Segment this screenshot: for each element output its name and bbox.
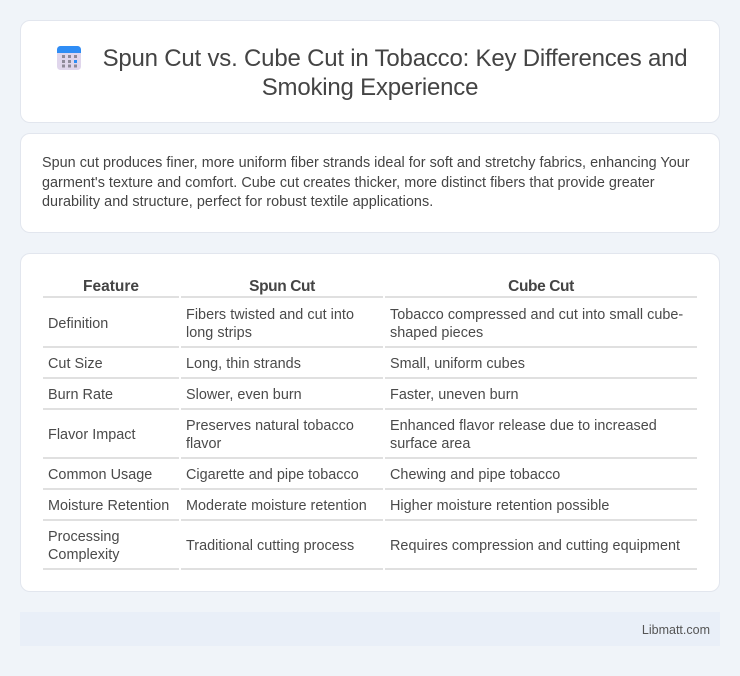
row: Moisture Retention: Moisture Retention	[48, 498, 169, 514]
Burn Rate: Cube Cut: Faster, uneven burn	[390, 387, 519, 403]
Flavor Impact: Cube Cut	[390, 418, 657, 452]
Burn Rate: Spun Cut: Slower, even burn	[186, 387, 302, 403]
row: Processing Complexity	[48, 529, 120, 563]
footer text: Libmatt.com	[642, 623, 710, 637]
title: Smoking Experience	[262, 74, 478, 101]
Definition: Cube Cut	[390, 307, 683, 341]
Moisture Retention: Spun Cut: Moderate moisture retention	[186, 498, 367, 514]
row: Processing Complexity: Processing	[48, 529, 120, 545]
table header: Feature: Feature	[83, 278, 139, 295]
Definition: Spun Cut: Fibers twisted and cut into	[186, 307, 354, 323]
Cut Size: Spun Cut: Long, thin strands	[186, 356, 301, 372]
Definition: Cube Cut: shaped pieces	[390, 325, 483, 341]
table header: Spun Cut: Spun Cut	[249, 278, 315, 295]
Definition: Spun Cut: long strips	[186, 325, 252, 341]
Flavor Impact: Spun Cut: flavor	[186, 436, 221, 452]
row: Cut Size: Cut Size	[48, 356, 103, 372]
row: Common Usage: Common Usage	[48, 467, 152, 483]
panel: comparison table	[20, 253, 720, 592]
row: Burn Rate: Burn Rate	[48, 387, 113, 403]
row: Definition: Definition	[48, 316, 108, 332]
intro paragraph: durability and structure, perfect for robust textile applications.	[42, 194, 433, 210]
intro paragraph: Spun cut produces finer, more uniform fiber strands ideal for soft and stretchy fabrics, enhancing Your	[42, 155, 690, 171]
row: Processing Complexity: Complexity	[48, 547, 119, 563]
panel: intro text	[20, 133, 720, 233]
Definition: Cube Cut: Tobacco compressed and cut into small cube-	[390, 307, 683, 323]
Moisture Retention: Cube Cut: Higher moisture retention possible	[390, 498, 609, 514]
Flavor Impact: Spun Cut	[186, 418, 354, 452]
Flavor Impact: Cube Cut: surface area	[390, 436, 470, 452]
Flavor Impact: Spun Cut: Preserves natural tobacco	[186, 418, 354, 434]
icon: calendar	[57, 46, 81, 70]
row: Flavor Impact: Flavor Impact	[48, 427, 136, 443]
title: Spun Cut vs. Cube Cut in Tobacco: Key Differences and	[103, 45, 687, 72]
Common Usage: Cube Cut: Chewing and pipe tobacco	[390, 467, 560, 483]
intro paragraph: garment's texture and comfort. Cube cut creates thicker, more distinct fibers that provide greater	[42, 174, 655, 190]
panel: title card	[20, 20, 720, 123]
Flavor Impact: Cube Cut: Enhanced flavor release due to increased	[390, 418, 657, 434]
intro paragraph	[42, 155, 690, 210]
footer bar	[20, 612, 720, 646]
Definition: Spun Cut	[186, 307, 354, 341]
Processing Complexity: Cube Cut: Requires compression and cutting equipment	[390, 538, 680, 554]
title	[103, 45, 687, 101]
Cut Size: Cube Cut: Small, uniform cubes	[390, 356, 525, 372]
Common Usage: Spun Cut: Cigarette and pipe tobacco	[186, 467, 359, 483]
table header: Cube Cut: Cube Cut	[508, 278, 574, 295]
Processing Complexity: Spun Cut: Traditional cutting process	[186, 538, 354, 554]
